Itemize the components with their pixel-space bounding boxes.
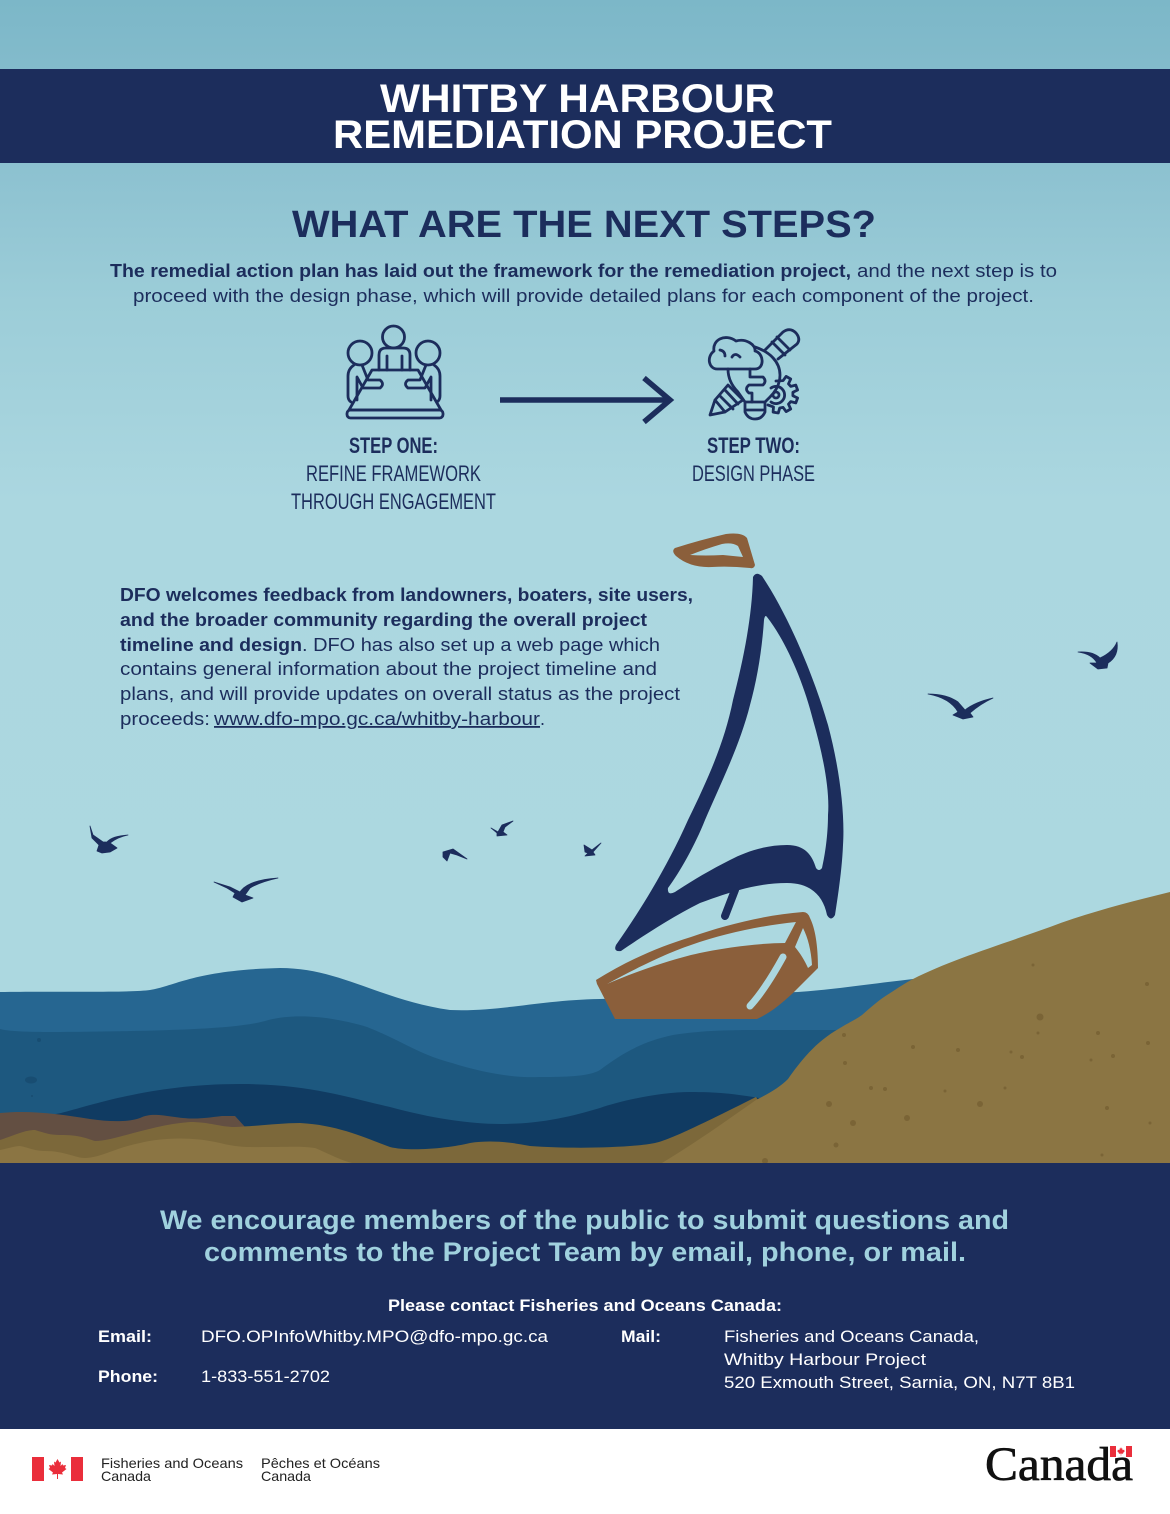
feedback text block [120,585,693,729]
sky background [0,0,1170,1163]
feedback text block: www.dfo-mpo.gc.ca/whitby-harbour [213,709,540,729]
contact subheading: Please contact Fisheries and Oceans Canada: [388,1296,782,1315]
call to action [160,1205,1009,1267]
title banner [0,69,1170,163]
intro paragraph: The remedial action plan has laid out the framework for the remediation project, [110,261,851,281]
feedback text block: DFO welcomes feedback from landowners, boaters, site users, [120,585,693,605]
department name: Canada [261,1468,311,1484]
department name [101,1455,380,1484]
Canada wordmark: Canada [985,1438,1133,1491]
hull [596,912,818,1019]
mast [725,890,735,916]
step two label: DESIGN PHASE [692,461,815,486]
contact details: DFO.OPInfoWhitby.MPO@dfo-mpo.gc.ca [201,1327,549,1346]
contact details: Mail: [621,1327,661,1346]
contact details: Whitby Harbour Project [724,1350,926,1369]
step two label [692,433,815,486]
water: middle wave [0,1016,880,1163]
intro paragraph [110,261,1057,306]
contact details [98,1327,1075,1392]
arrow: step one to step two [500,378,670,422]
step one label [291,433,496,514]
title banner: WHITBY HARBOUR [380,77,775,121]
logo: Government of Canada flag [32,1457,83,1481]
department name: Pêches et Océans [261,1455,380,1471]
icon: design bulb, pencil and gear [709,330,799,419]
call to action: comments to the Project Team by email, phone, or mail. [204,1237,966,1267]
title banner: REMEDIATION PROJECT [333,113,832,157]
hull stripe [750,957,783,1006]
sand specks [762,964,1152,1164]
department name: Canada [101,1468,151,1484]
intro paragraph: proceed with the design phase, which will provide detailed plans for each component of the project. [133,286,1034,306]
seagulls [90,642,1117,902]
contact details: Phone: [98,1367,158,1386]
feedback text block: . [540,709,545,729]
boat flag [673,534,755,568]
water: front wave [0,1084,780,1163]
water: back wave [0,968,1170,1163]
contact panel [0,1163,1170,1429]
department name: Fisheries and Oceans [101,1455,243,1471]
feedback text block: timeline and design [120,635,302,655]
contact details: 1-833-551-2702 [201,1367,330,1386]
call to action: We encourage members of the public to submit questions and [160,1205,1009,1235]
step one label: THROUGH ENGAGEMENT [291,489,496,514]
feedback text block: contains general information about the project timeline and [120,659,657,679]
feedback text block: plans, and will provide updates on overall status as the project [120,684,680,704]
shoreline: dark sand [0,1097,800,1163]
contact details: Fisheries and Oceans Canada, [724,1327,979,1346]
shoreline: brown rock [0,1112,246,1163]
step one label: REFINE FRAMEWORK [306,461,481,486]
sailboat [596,534,843,1019]
contact details: Email: [98,1327,152,1346]
intro paragraph: and the next step is to [857,261,1057,281]
sandy hill [662,892,1170,1163]
heading: next steps: WHAT ARE THE NEXT STEPS? [292,204,876,246]
sail [615,574,843,951]
water specks [25,1038,41,1097]
feedback text block: proceeds: [120,709,210,729]
feedback text block: . DFO has also set up a web page which [302,635,660,655]
step one label: STEP ONE: [349,433,438,458]
step two label: STEP TWO: [707,433,800,458]
icon: meeting around a table [347,326,443,418]
feedback text block: and the broader community regarding the overall project [120,610,647,630]
contact details: 520 Exmouth Street, Sarnia, ON, N7T 8B1 [724,1373,1075,1392]
shoreline: light sand [0,1138,352,1163]
